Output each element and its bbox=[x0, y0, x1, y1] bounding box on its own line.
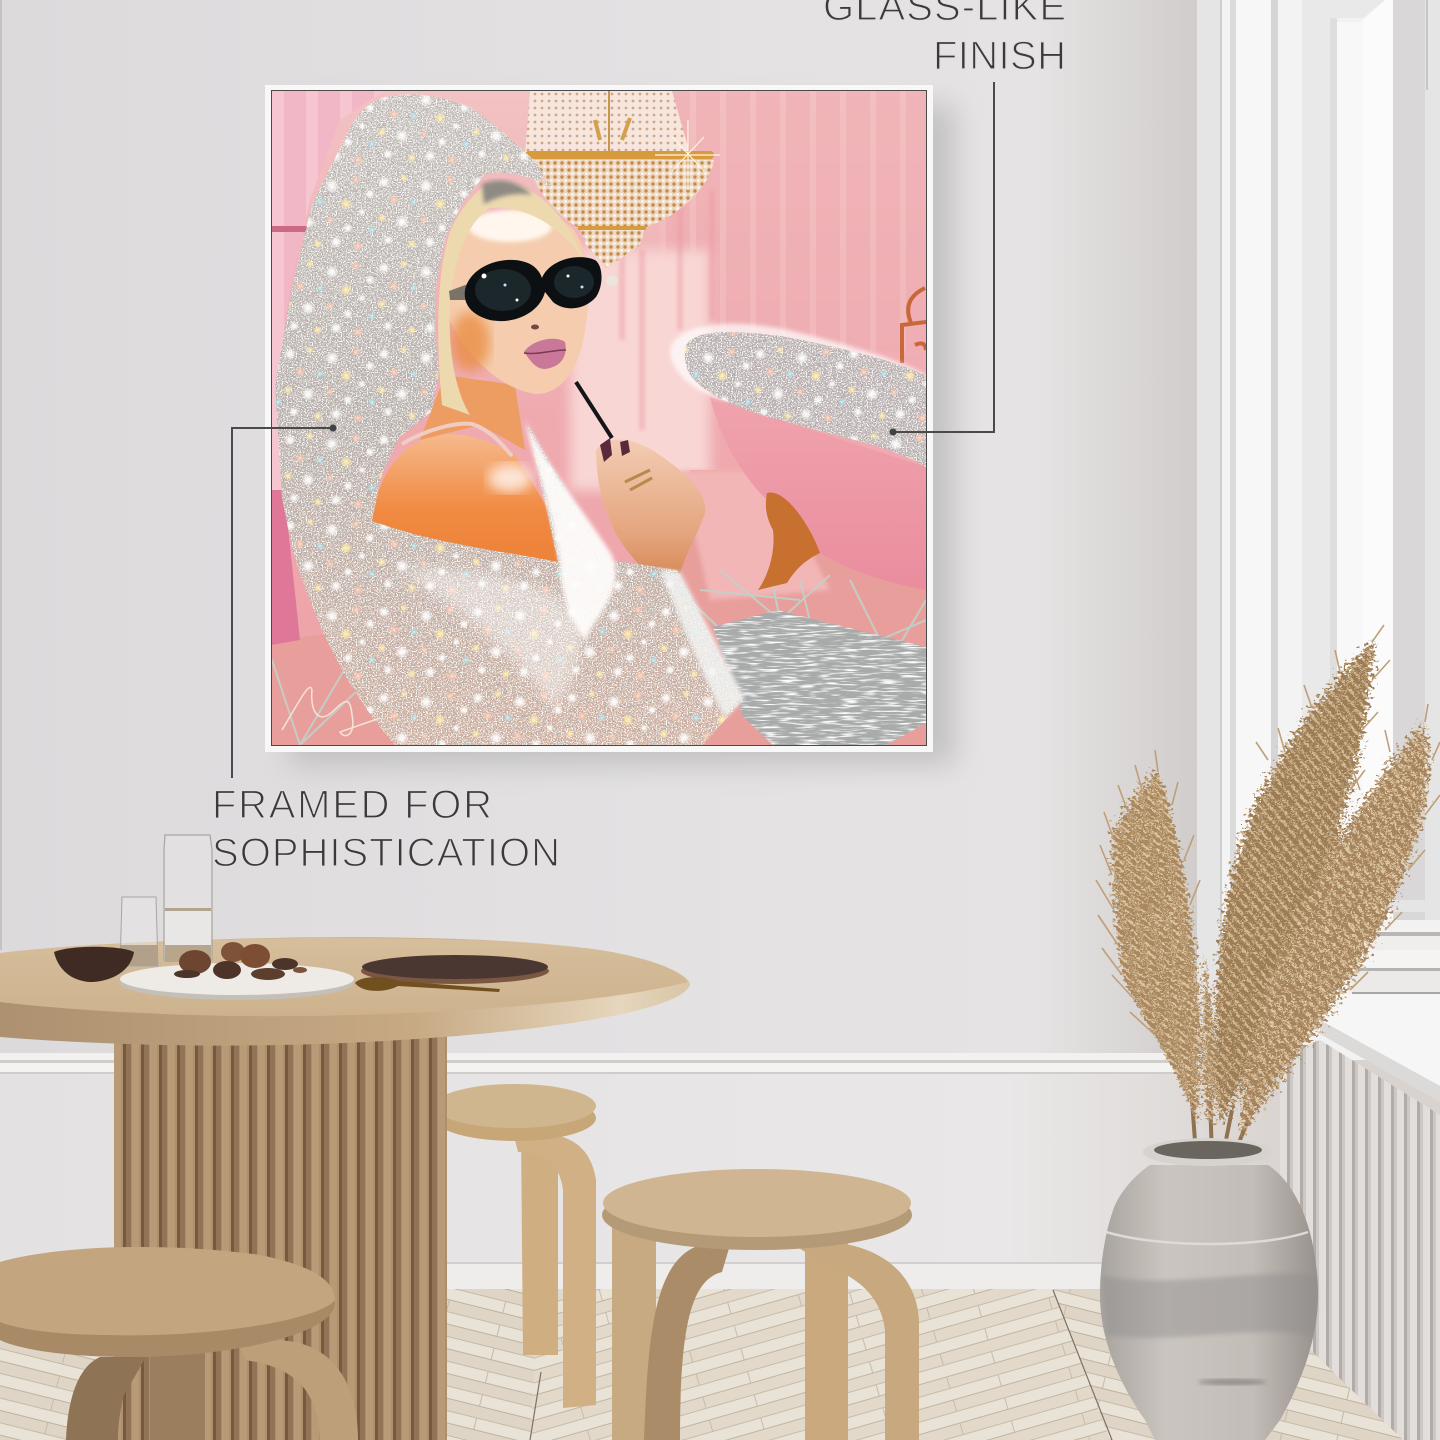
artwork shadow bbox=[290, 105, 955, 765]
painting bbox=[272, 91, 926, 745]
tub body bbox=[710, 397, 926, 590]
skin: shoulder bbox=[372, 434, 558, 562]
pink floor bbox=[272, 470, 926, 745]
glass carafe bbox=[164, 835, 212, 962]
nose shadow bbox=[531, 324, 539, 330]
stems bbox=[1192, 1100, 1252, 1155]
callout text: framed for sophistication: SOPHISTICATION bbox=[212, 831, 560, 875]
stone vase bbox=[1100, 1138, 1318, 1440]
plumes bbox=[1112, 640, 1429, 1135]
mascara wand bbox=[576, 382, 612, 438]
white robe front bbox=[400, 569, 583, 710]
chandelier bbox=[525, 91, 720, 268]
tub claw foot bbox=[758, 493, 820, 590]
dark bowl bbox=[54, 947, 134, 982]
vase rim bbox=[1143, 1138, 1273, 1166]
callout text: glass-like finish: FINISH bbox=[933, 34, 1066, 78]
glitter tub rim bbox=[685, 332, 926, 467]
callout line: framed for sophistication bbox=[232, 424, 336, 778]
vase band bbox=[1106, 1232, 1308, 1244]
hand bbox=[596, 438, 706, 574]
callout text: framed for sophistication bbox=[212, 783, 560, 875]
bra strap bbox=[402, 424, 512, 456]
glass tumbler bbox=[120, 897, 158, 966]
herringbone floor bbox=[0, 1289, 1440, 1440]
bathtub bbox=[670, 288, 926, 590]
marble plate with nuts bbox=[120, 942, 354, 1000]
white tub rim glow bbox=[670, 324, 926, 402]
radiator bbox=[1280, 1040, 1440, 1440]
white robe sleeve edge bbox=[660, 570, 745, 718]
callout line: glass-like finish bbox=[890, 82, 994, 436]
pink bathroom wall bbox=[278, 91, 926, 638]
signature bbox=[282, 687, 380, 736]
window with white mouldings bbox=[1197, 0, 1440, 1060]
hair strand bbox=[482, 180, 532, 204]
stack of books bbox=[1352, 932, 1440, 994]
nuts bbox=[174, 942, 307, 980]
callout text: glass-like finish bbox=[823, 0, 1066, 78]
frond tips bbox=[1096, 625, 1440, 1035]
callout text: framed for sophistication: FRAMED FOR bbox=[212, 783, 492, 827]
fluted table pedestal bbox=[114, 1035, 447, 1440]
forehead highlight bbox=[468, 210, 552, 242]
pink curtain bbox=[272, 91, 385, 645]
window sill, books and radiator bbox=[1280, 932, 1440, 1440]
left stool bbox=[0, 1247, 358, 1440]
front stool bbox=[602, 1169, 919, 1440]
round wood table top bbox=[0, 937, 690, 1046]
wooden spoon bbox=[355, 977, 500, 992]
white frame bbox=[265, 85, 933, 752]
vase smudged band bbox=[1102, 1274, 1317, 1338]
framed artwork bbox=[265, 85, 933, 752]
vase lower dark smudge bbox=[1198, 1379, 1266, 1385]
lips bbox=[524, 339, 566, 369]
white robe collar bbox=[525, 421, 616, 640]
glitter towel and robe bbox=[275, 94, 743, 745]
woman's neck and face bbox=[402, 180, 589, 456]
cheek shade bbox=[450, 312, 490, 372]
tub faucet bbox=[902, 288, 926, 363]
sill bbox=[1320, 994, 1440, 1086]
silver rug bbox=[713, 610, 926, 745]
blonde hair bbox=[438, 181, 585, 415]
dark wooden plate bbox=[361, 955, 549, 984]
dried pampas grass bbox=[1096, 625, 1440, 1155]
back stool bbox=[434, 1084, 596, 1408]
sunglasses bbox=[449, 257, 618, 321]
